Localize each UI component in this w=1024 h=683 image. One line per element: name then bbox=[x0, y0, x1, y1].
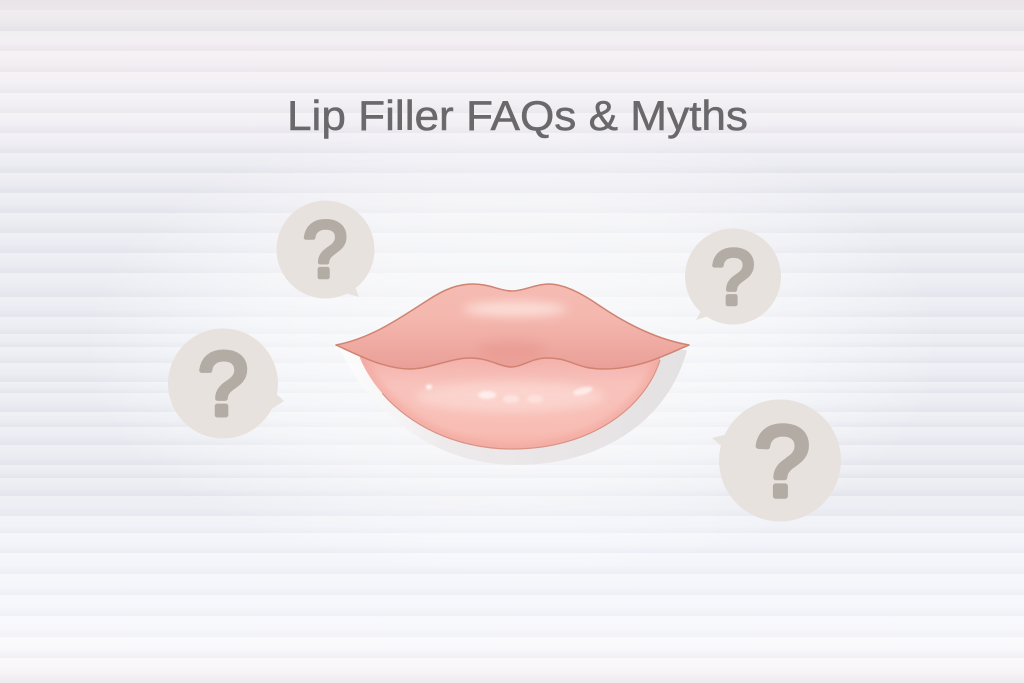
illustration: glossy pink lips bbox=[336, 284, 689, 465]
lower lip bbox=[360, 345, 660, 449]
upper lip bbox=[336, 284, 689, 369]
speech bubble: lower left question bbox=[168, 328, 284, 438]
title: Lip Filler FAQs & Myths bbox=[287, 92, 748, 139]
speech bubble: lower right question bbox=[712, 400, 841, 522]
lips soft shadow bbox=[340, 350, 687, 465]
speech bubble: lower right question: ? bbox=[754, 406, 810, 518]
speech bubble: top left question bbox=[276, 200, 374, 298]
speech bubble: top right question: ? bbox=[711, 233, 755, 321]
lower lip highlights bbox=[426, 384, 594, 403]
speech bubble: top left question: ? bbox=[303, 205, 347, 294]
speech bubble: top right question bbox=[685, 228, 781, 324]
speech bubble: lower left question: ? bbox=[198, 335, 248, 435]
